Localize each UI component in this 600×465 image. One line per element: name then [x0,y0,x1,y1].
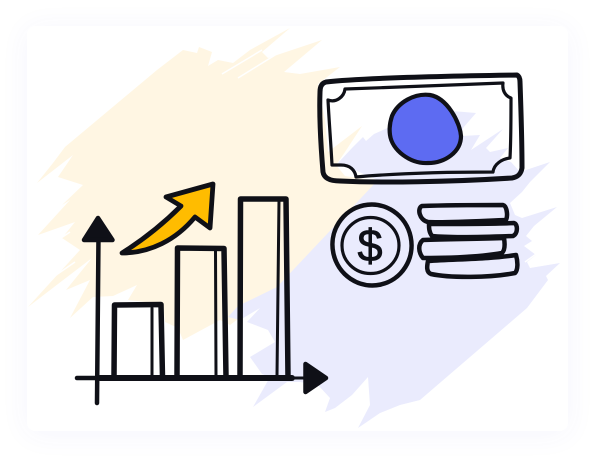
bar 1 [114,304,162,377]
icon: dollar coin [325,197,419,293]
icon: coin stack [419,205,517,277]
icon: rising arrow [122,184,213,253]
brush stroke: lavender background [228,110,560,428]
dollar sign: $ [357,220,383,271]
coin 1 [419,205,507,222]
banknote inner border [328,83,511,177]
coin 2 [429,223,517,237]
chart: bars with axes [77,199,326,403]
x axis [77,364,326,392]
coin 3 [419,238,505,258]
brush stroke: yellow background [28,28,378,340]
y axis [84,218,112,403]
panel: white card [27,26,568,431]
coin 4 [427,255,517,277]
bar 2 [177,248,226,377]
bar 3 [240,199,288,377]
icon: banknote [320,75,522,182]
banknote centre circle [390,95,461,163]
banknote outer border [320,75,522,182]
